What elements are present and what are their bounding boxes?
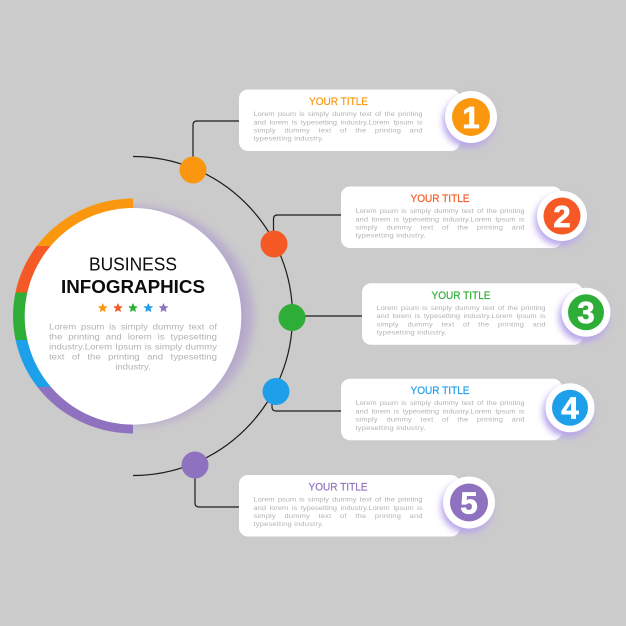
heading [61, 254, 205, 297]
panel: step 2: 2 [553, 199, 571, 234]
intro text: the printing and lorem is typesetting [49, 332, 217, 341]
panel: step 5: and lorem is typesetting industry.Lorem Ipsum is [254, 505, 423, 512]
segmented colour ring [13, 198, 133, 434]
timeline arc [133, 156, 292, 476]
panel: step 2: simply dummy text of the printing and [356, 225, 525, 231]
panel: step 1 [239, 90, 497, 151]
panel: step 3: and lorem is typesetting industry.Lorem Ipsum is [376, 313, 546, 320]
intro text: text of the printing and typesetting [49, 352, 217, 361]
panel: step 4 [341, 379, 594, 440]
panel: step 5: 5 [460, 486, 478, 521]
panel: step 2: Lorem psum is simply dummy text of the printing [356, 208, 525, 215]
panel: step 2: typesetting industry. [356, 233, 426, 240]
panel: step 4: typesetting industry. [356, 425, 426, 432]
panel: step 4: 4 [561, 390, 579, 425]
heading: INFOGRAPHICS [61, 276, 205, 297]
panel: step 5: typesetting industry. [254, 522, 324, 528]
panel: step 4: and lorem is typesetting industry.Lorem Ipsum is [356, 409, 525, 415]
panel: step 1: typesetting industry. [254, 136, 324, 143]
heading: BUSINESS [89, 254, 177, 274]
panel: step 5 [239, 475, 495, 536]
panel: step 4: simply dummy text of the printing and [356, 417, 525, 424]
intro text: industry. [115, 362, 151, 371]
panel: step 3: typesetting industry. [376, 330, 447, 336]
panel: step 5: simply dummy text of the printing and [254, 513, 423, 520]
panel: step 1: YOUR TITLE [309, 96, 368, 108]
panel: step 4: Lorem psum is simply dummy text of the printing [356, 401, 525, 407]
intro text [49, 322, 218, 371]
panel: step 2: YOUR TITLE [410, 193, 470, 205]
panel: step 3: simply dummy text of the printing and [376, 322, 546, 328]
panel: step 5: YOUR TITLE [308, 482, 368, 494]
intro text: Lorem psum is simply dummy text of [49, 322, 218, 331]
panel: step 1: and lorem is typesetting industry.Lorem Ipsum is [254, 120, 423, 126]
panel: step 3: YOUR TITLE [432, 290, 490, 302]
rating stars [99, 304, 167, 311]
panel: step 4: YOUR TITLE [410, 385, 470, 397]
panel: step 3: 3 [577, 295, 595, 330]
main white circle [25, 208, 241, 425]
panel: step 3 [362, 283, 610, 345]
panel: step 5: Lorem psum is simply dummy text of the printing [254, 497, 423, 503]
panel: step 1: 1 [462, 100, 480, 135]
panel: step 2: and lorem is typesetting industry.Lorem Ipsum is [356, 217, 525, 223]
intro text: industry.Lorem Ipsum is simply dummy [49, 342, 218, 351]
purple halo [133, 203, 256, 429]
panel: step 1: simply dummy text of the printing and [254, 128, 423, 134]
connector lines [193, 121, 363, 507]
timeline nodes [180, 156, 306, 478]
panel: step 1: Lorem psum is simply dummy text of the printing [254, 111, 423, 118]
panel: step 3: Lorem psum is simply dummy text of the printing [376, 305, 546, 312]
panel: step 2 [341, 186, 587, 248]
